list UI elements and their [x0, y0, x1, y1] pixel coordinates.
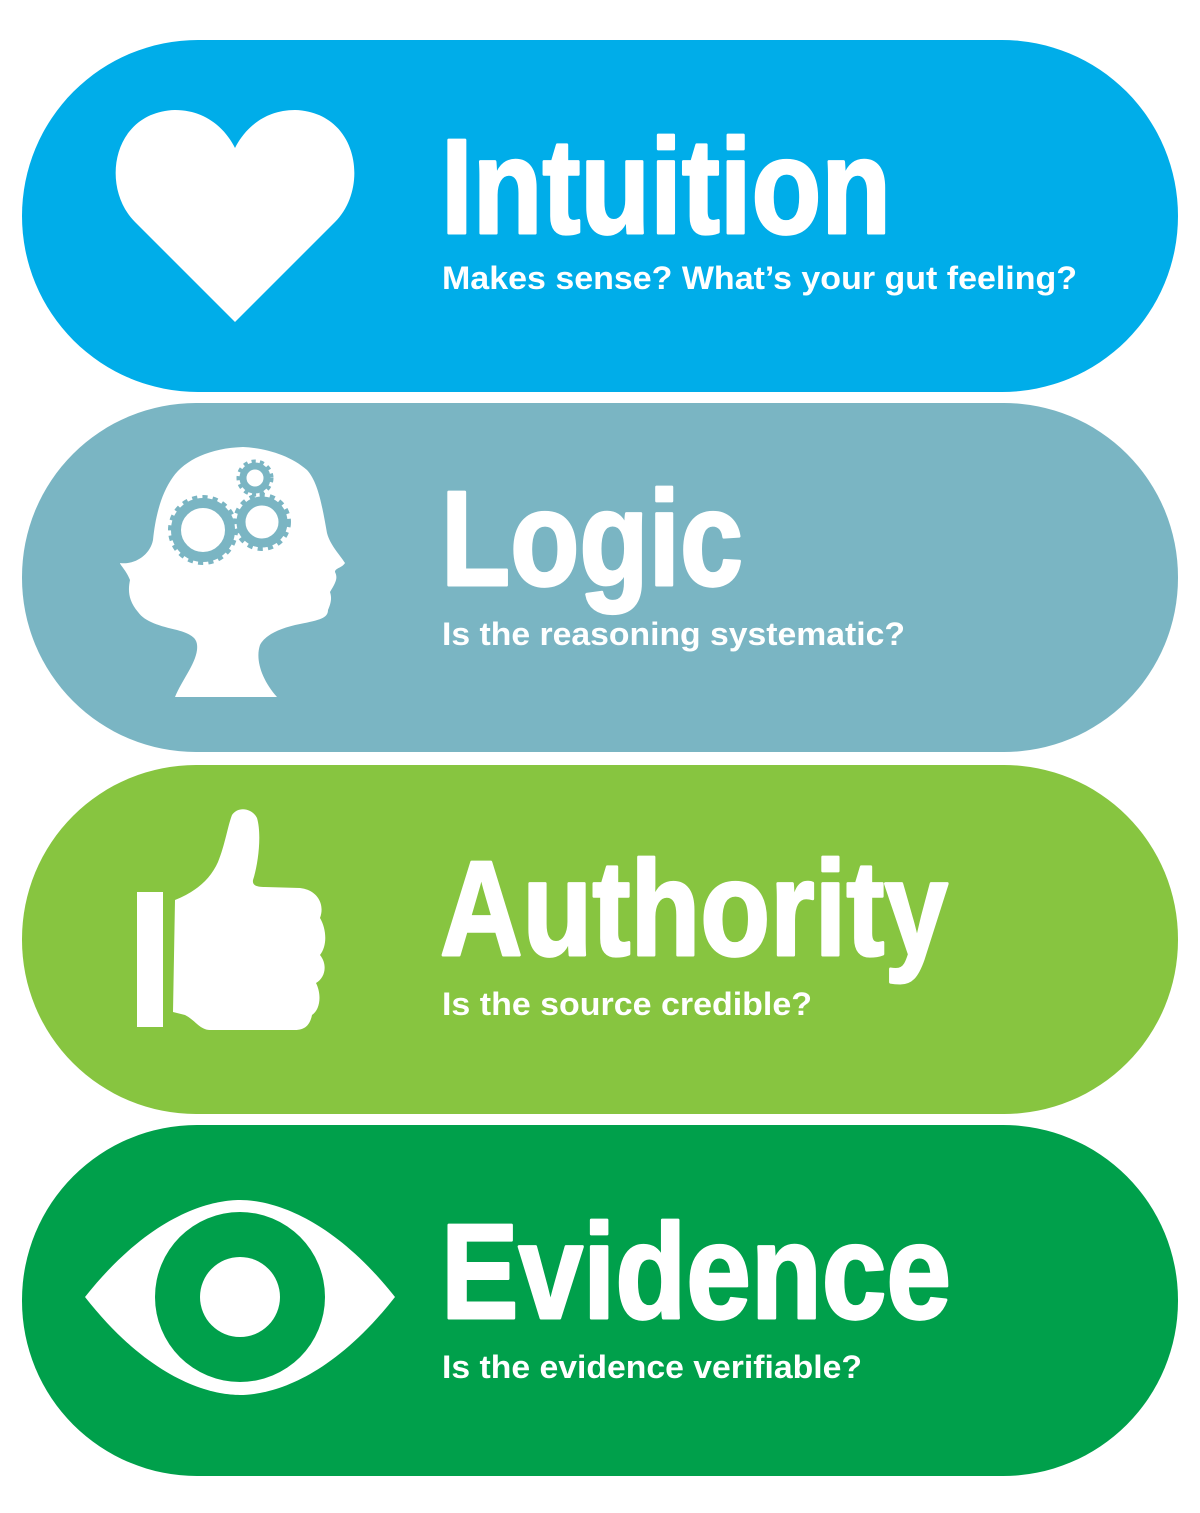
- icon: head with gears: [120, 447, 345, 697]
- heading: Intuition: Intuition: [441, 111, 891, 262]
- panel: intuition: [22, 40, 1178, 392]
- heading: Logic: Logic: [441, 463, 743, 614]
- icon: thumbs up: [137, 809, 325, 1030]
- heading: Evidence: Evidence: [441, 1196, 951, 1347]
- icon: heart: [116, 110, 354, 322]
- icon: eye: [85, 1200, 395, 1395]
- panel: logic: [22, 403, 1178, 752]
- text: intuition question: Makes sense? What’s your gut feeling?: [442, 260, 1077, 296]
- text: evidence question: Is the evidence verifiable?: [442, 1349, 862, 1385]
- panel: authority: [22, 765, 1178, 1114]
- text: authority question: Is the source credible?: [442, 986, 812, 1022]
- panel: evidence: [22, 1125, 1178, 1476]
- text: logic question: Is the reasoning systematic?: [442, 616, 905, 652]
- heading: Authority: Authority: [440, 833, 948, 984]
